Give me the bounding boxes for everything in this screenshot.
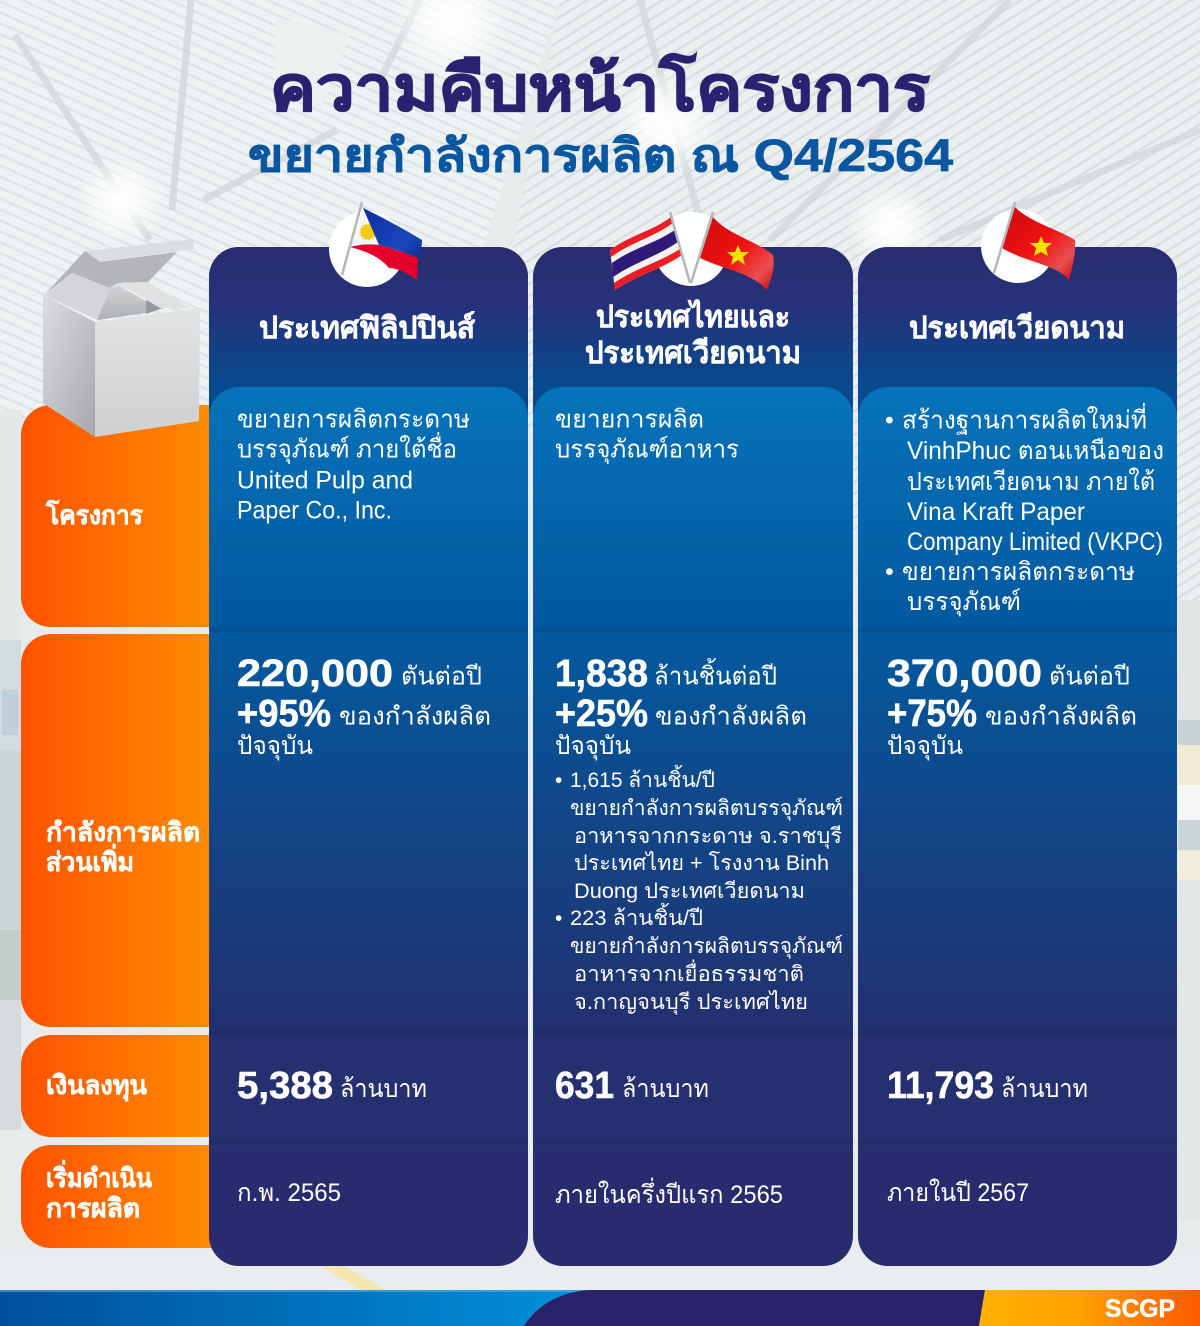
capacity breakdown list: • — [555, 907, 562, 930]
heading: Thailand and Vietnam: ประเทศไทยและ — [596, 299, 790, 334]
card body — [858, 247, 1177, 1266]
text: project description: Vina Kraft Paper — [907, 498, 1085, 526]
text: added capacity: ของกำลังผลิต — [339, 702, 491, 730]
icon: Philippines flag — [329, 202, 422, 287]
project section background — [533, 387, 853, 630]
text: added capacity: ปัจจุบัน — [555, 732, 631, 761]
text: start date: ภายในครึ่งปีแรก 2565 — [555, 1177, 783, 1209]
text: investment — [555, 1065, 709, 1107]
label: investment: เงินลงทุน — [46, 1070, 147, 1102]
label: production start: เริ่มดำเนิน — [46, 1159, 152, 1193]
panel: Philippines column — [209, 202, 528, 1266]
text: project description: VinhPhuc ตอนเหนือของ — [907, 437, 1164, 465]
text: project description: บรรจุภัณฑ์ ภายใต้ชื่อ — [237, 432, 457, 464]
text: investment: ล้านบาท — [1001, 1075, 1088, 1103]
text: investment: 11,793 — [887, 1065, 994, 1107]
text: added capacity: +95% — [237, 693, 331, 735]
label: project: โครงการ — [45, 499, 143, 530]
icon: Thai and Vietnamese flags — [610, 212, 774, 290]
heading: Vietnam: ประเทศเวียดนาม — [909, 312, 1125, 345]
text: project description — [237, 406, 470, 524]
capacity breakdown list: ประเทศไทย + โรงงาน Binh — [574, 851, 829, 875]
text: investment: 631 — [555, 1065, 614, 1107]
text: added capacity: ของกำลังผลิต — [655, 702, 807, 730]
card body — [533, 247, 853, 1266]
text: project description — [555, 406, 739, 464]
text: investment: 5,388 — [237, 1065, 333, 1107]
label: investment — [21, 1035, 251, 1137]
project section background — [209, 387, 528, 630]
subtitle: ขยายกำลังการผลิต ณ Q4/2564 — [248, 130, 953, 181]
text: project description: บรรจุภัณฑ์อาหาร — [555, 436, 739, 464]
text: investment — [237, 1065, 427, 1107]
text: project description: ขยายการผลิต — [555, 406, 704, 434]
text: added capacity: ตันต่อปี — [401, 662, 482, 690]
text: added capacity — [887, 653, 1137, 761]
text: project description — [885, 402, 1164, 617]
capacity breakdown list: • — [555, 769, 562, 792]
title: ความคืบหน้าโครงการ — [270, 52, 930, 124]
text: project description: บรรจุภัณฑ์ — [907, 588, 1021, 617]
label: added capacity: ส่วนเพิ่ม — [46, 843, 134, 877]
icon: white carton box — [43, 239, 200, 437]
label: added capacity: กำลังการผลิต — [46, 817, 200, 847]
text: project description: • — [885, 406, 894, 434]
row labels: orange pills — [21, 405, 251, 1248]
text: added capacity — [555, 653, 843, 1015]
text: investment: ล้านบาท — [622, 1075, 709, 1103]
text: project description: • — [885, 558, 894, 586]
text: added capacity: 370,000 — [887, 653, 1042, 695]
text: added capacity: ของกำลังผลิต — [985, 702, 1137, 730]
heading: Thailand and Vietnam — [585, 299, 801, 370]
heading: Philippines: ประเทศฟิลิปปินส์ — [259, 311, 476, 345]
text: added capacity — [237, 653, 491, 761]
card body — [209, 247, 528, 1266]
text: project description: United Pulp and — [237, 466, 413, 494]
capacity breakdown list: 223 ล้านชิ้น/ปี — [570, 903, 703, 930]
label: added capacity — [21, 634, 251, 1027]
panel: Thailand and Vietnam column — [533, 212, 853, 1266]
panel: Vietnam column — [858, 202, 1177, 1266]
text: project description: ประเทศเวียดนาม ภายใต้ — [907, 467, 1155, 496]
project section background — [858, 387, 1177, 630]
text: added capacity: ปัจจุบัน — [887, 732, 963, 761]
text: project description: ขยายการผลิตกระดาษ — [237, 406, 470, 434]
icon: Vietnam flag — [981, 202, 1075, 283]
text: project description: Paper Co., Inc. — [237, 496, 392, 524]
capacity breakdown list: ขยายกำลังการผลิตบรรจุภัณฑ์ — [570, 934, 843, 959]
capacity breakdown list: จ.กาญจนบุรี ประเทศไทย — [574, 990, 808, 1015]
text: investment — [887, 1065, 1088, 1107]
text: investment: ล้านบาท — [340, 1075, 427, 1103]
text: added capacity: +75% — [887, 693, 977, 735]
capacity breakdown list: อาหารจากเยื่อธรรมชาติ — [574, 959, 804, 986]
label: project — [21, 405, 251, 627]
label: production start — [21, 1145, 251, 1248]
text: added capacity: +25% — [555, 693, 648, 735]
heading: Thailand and Vietnam: ประเทศเวียดนาม — [585, 337, 801, 370]
label: production start: การผลิต — [46, 1193, 140, 1223]
text: added capacity: ล้านชิ้นต่อปี — [654, 658, 777, 690]
text: added capacity: 220,000 — [237, 653, 393, 695]
text: project description: Company Limited (VKPC) — [907, 528, 1163, 556]
capacity breakdown list: Duong ประเทศเวียดนาม — [574, 880, 805, 903]
footer bar with SCGP logo — [0, 1290, 1200, 1326]
capacity breakdown list — [555, 765, 843, 1015]
text: added capacity: 1,838 — [555, 653, 648, 695]
capacity breakdown list: ขยายกำลังการผลิตบรรจุภัณฑ์ — [570, 796, 843, 821]
text: start date: ก.พ. 2565 — [237, 1179, 341, 1207]
capacity breakdown list: 1,615 ล้านชิ้น/ปี — [570, 765, 715, 792]
text: added capacity: ตันต่อปี — [1049, 662, 1130, 690]
footer bar with SCGP logo: SCGP — [1105, 1295, 1175, 1323]
text: added capacity: ปัจจุบัน — [237, 732, 313, 761]
text: project description: ขยายการผลิตกระดาษ — [902, 558, 1135, 586]
capacity breakdown list: อาหารจากกระดาษ จ.ราชบุรี — [574, 825, 842, 849]
text: project description: สร้างฐานการผลิตใหม่ที่ — [902, 402, 1147, 434]
text: start date: ภายในปี 2567 — [887, 1178, 1029, 1207]
